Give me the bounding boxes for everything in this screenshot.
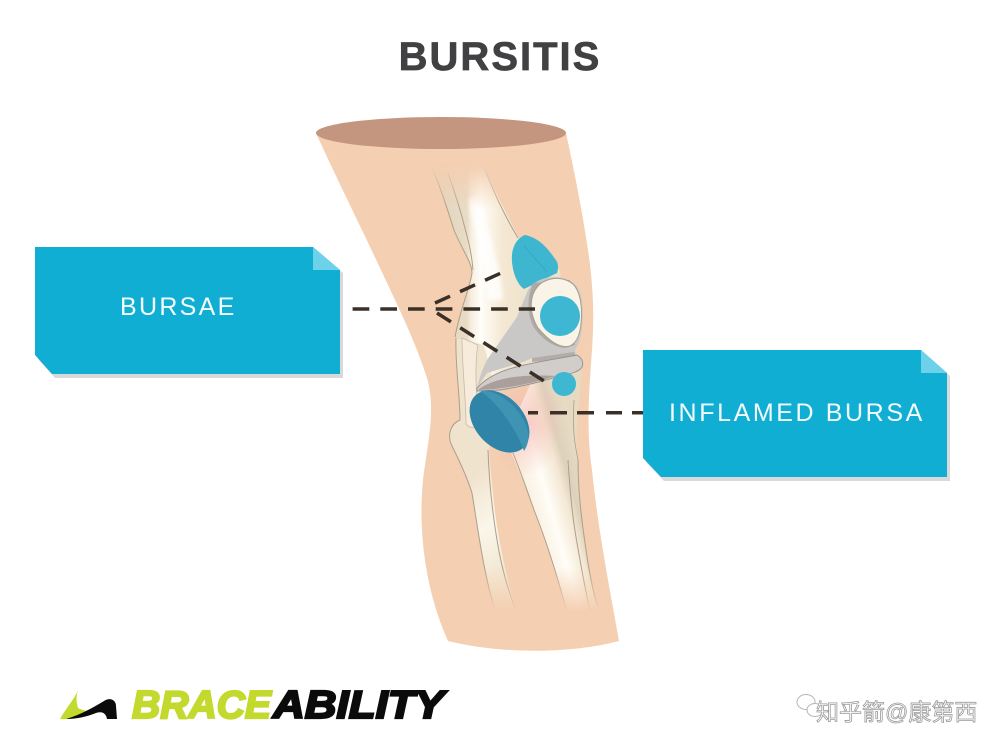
meniscus <box>477 355 583 391</box>
femur <box>432 165 565 385</box>
inflamed bursa <box>458 379 541 464</box>
lower bursa <box>552 372 576 396</box>
watermark <box>797 694 977 725</box>
patellar ligament and cartilage <box>477 277 583 388</box>
patellar bursa <box>540 296 580 336</box>
watermark text: 知乎箭@康第西 <box>816 699 977 725</box>
patella bone <box>531 278 582 347</box>
icon: chat bubbles <box>797 694 823 716</box>
thigh cross-section <box>316 117 566 149</box>
tibia <box>505 370 598 612</box>
panel: bursae label <box>35 247 343 378</box>
logo: BraceAbility: ABILITY <box>272 684 447 727</box>
logo text: BRACE <box>132 684 272 727</box>
fibula <box>450 338 515 610</box>
arrow: inflamed bursa leader line <box>528 411 643 414</box>
knee illustration <box>316 117 619 651</box>
logo: BraceAbility <box>60 684 447 727</box>
title: BURSITIS <box>399 35 601 79</box>
bones <box>432 165 598 612</box>
icon: logo swoosh <box>60 690 117 719</box>
inflamed bursa text: INFLAMED BURSA <box>669 399 925 427</box>
arrows: bursae leader lines <box>353 273 544 381</box>
inflammation glow <box>487 373 563 477</box>
bursae text: BURSAE <box>120 293 237 321</box>
upper bursa <box>512 235 558 289</box>
panel: inflamed bursa label <box>643 350 950 481</box>
leg skin <box>316 133 619 651</box>
